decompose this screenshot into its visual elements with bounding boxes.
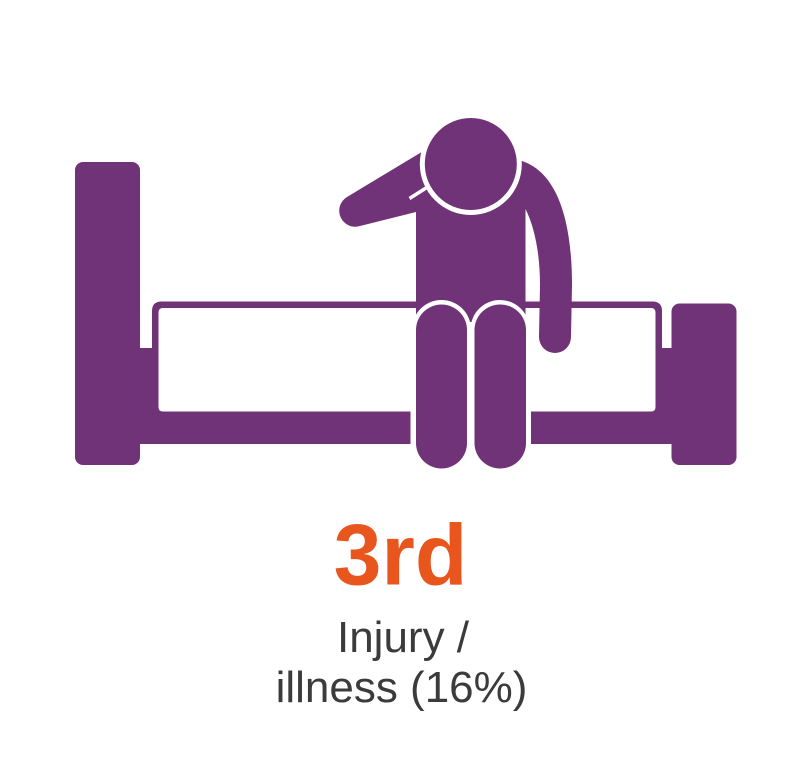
left leg outline: [412, 300, 471, 472]
head: [425, 118, 517, 210]
icon: seated person holding head: [339, 113, 572, 472]
rank heading: 3rd: [334, 508, 467, 604]
torso: [416, 175, 526, 322]
caption: [276, 613, 527, 712]
right leg fill: [474, 304, 526, 468]
mattress outline and bed rail: [140, 302, 672, 444]
left arm raised to head: [339, 151, 424, 227]
caption line 2: illness (16%): [276, 663, 527, 712]
right leg outline: [470, 300, 530, 472]
head ring: [420, 113, 522, 215]
caption line 1: Injury /: [337, 613, 470, 662]
left bed post: [75, 162, 140, 465]
right bed post: [672, 304, 736, 465]
icon: bed: [75, 162, 736, 465]
left leg fill: [416, 304, 467, 468]
hand detail line: [410, 188, 426, 198]
right arm: [517, 158, 572, 353]
gap in rail behind legs: [410, 405, 531, 450]
